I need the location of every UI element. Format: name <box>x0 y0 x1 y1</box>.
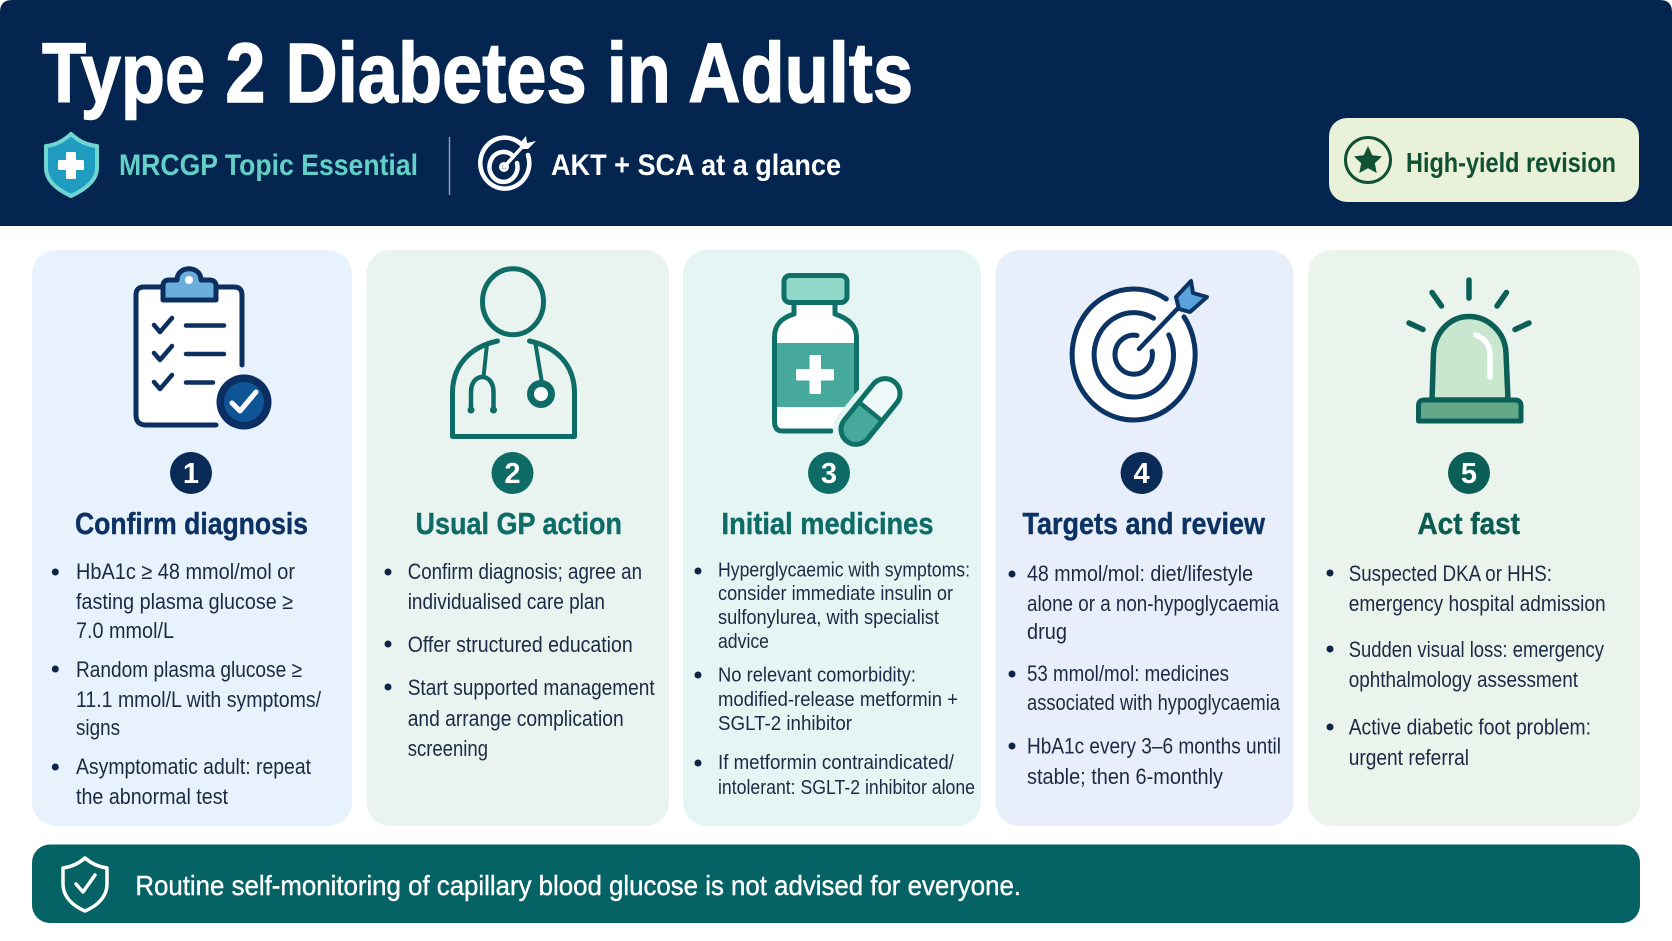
bullet list: HbA1c every 3–6 months until <box>1027 734 1281 758</box>
step number 2: 2 <box>504 458 521 490</box>
bullet list: drug <box>1027 619 1067 644</box>
bullet list: consider immediate insulin or <box>718 582 953 605</box>
bullet list: 48 mmol/mol: diet/lifestyle <box>1027 561 1253 586</box>
bullet list: ophthalmology assessment <box>1349 667 1578 692</box>
subtitle: MRCGP Topic Essential: MRCGP Topic Essential <box>119 149 418 182</box>
step number 4 <box>1121 452 1163 494</box>
bullet list: associated with hypoglycaemia <box>1027 690 1281 715</box>
panel: act fast <box>1308 250 1640 826</box>
bullet list: stable; then 6-monthly <box>1027 764 1223 789</box>
bullet list <box>52 559 322 809</box>
bullet list <box>1326 561 1606 770</box>
bullet list: advice <box>718 630 769 653</box>
bullet list: and arrange complication <box>408 706 624 731</box>
header band <box>0 0 1672 226</box>
bullet list: the abnormal test <box>76 784 228 809</box>
bullet list: Sudden visual loss: emergency <box>1349 637 1604 662</box>
bullet list: Offer structured education <box>408 632 633 657</box>
bullet list: fasting plasma glucose ≥ <box>76 589 293 614</box>
icon: clipboard <box>136 269 272 430</box>
bullet list: No relevant comorbidity: <box>718 664 916 686</box>
bullet list: screening <box>408 736 488 761</box>
bullet list: Start supported management <box>408 675 655 700</box>
bullet list: urgent referral <box>1349 745 1469 770</box>
bullet list: intolerant: SGLT-2 inhibitor alone <box>718 776 975 799</box>
heading: Initial medicines <box>722 506 934 541</box>
bullet list: modified-release metformin + <box>718 688 958 711</box>
bullet list: SGLT-2 inhibitor <box>718 712 852 735</box>
bullet list: Hyperglycaemic with symptoms: <box>718 558 970 582</box>
step number 5 <box>1448 452 1490 494</box>
heading: Targets and review <box>1022 506 1266 541</box>
bullet list <box>384 559 655 761</box>
step number 1 <box>170 452 212 494</box>
heading: Act fast <box>1418 506 1520 541</box>
panel: targets and review <box>996 250 1294 826</box>
icon: check shield <box>63 858 107 911</box>
bullet list <box>694 558 975 799</box>
bullet list: HbA1c ≥ 48 mmol/mol or <box>76 559 295 584</box>
bullet list: Confirm diagnosis; agree an <box>408 559 642 584</box>
heading: Confirm diagnosis <box>75 506 308 541</box>
badge: high-yield revision: High-yield revision <box>1406 147 1616 178</box>
bullet list: 11.1 mmol/L with symptoms/ <box>76 687 322 712</box>
bullet list: Random plasma glucose ≥ <box>76 657 302 682</box>
icon: alarm siren <box>1409 280 1529 421</box>
bullet list: Asymptomatic adult: repeat <box>76 754 311 779</box>
subtitle: AKT + SCA at a glance: AKT + SCA at a glance <box>551 149 841 182</box>
step number 1: 1 <box>183 458 199 490</box>
bullet list: individualised care plan <box>408 589 605 614</box>
heading: Usual GP action <box>416 506 622 541</box>
step number 5: 5 <box>1461 458 1477 490</box>
bullet list: alone or a non-hypoglycaemia <box>1027 591 1280 616</box>
step number 3 <box>808 452 850 494</box>
icon: target <box>480 136 536 189</box>
icon: doctor with stethoscope <box>452 269 574 436</box>
icon: target with arrow <box>1072 281 1207 420</box>
bullet list: 7.0 mmol/L <box>76 618 174 643</box>
bullet list: Active diabetic foot problem: <box>1349 714 1591 740</box>
bullet list: If metformin contraindicated/ <box>718 751 954 774</box>
bullet list: signs <box>76 715 120 740</box>
step number 4: 4 <box>1134 458 1150 490</box>
bullet list: emergency hospital admission <box>1349 591 1606 616</box>
panel: usual GP action <box>366 250 669 826</box>
icon: star <box>1346 138 1390 182</box>
callout: bottom banner <box>32 844 1640 923</box>
panel: initial medicines <box>683 250 981 826</box>
badge: high-yield revision <box>1329 118 1639 202</box>
bullet list: 53 mmol/mol: medicines <box>1027 661 1229 686</box>
bullet list: Suspected DKA or HHS: <box>1349 561 1552 586</box>
icon: medicine bottle and capsule <box>772 276 909 453</box>
bullet list: sulfonylurea, with specialist <box>718 606 939 629</box>
panel: confirm diagnosis <box>32 250 352 826</box>
title: Type 2 Diabetes in Adults <box>42 26 913 120</box>
bullet list <box>1008 561 1281 789</box>
step number 2 <box>492 452 534 494</box>
banner text: Routine self-monitoring of capillary blood glucose is not advised for everyone. <box>135 870 1021 901</box>
icon: medical shield <box>46 134 97 196</box>
step number 3: 3 <box>821 458 837 490</box>
